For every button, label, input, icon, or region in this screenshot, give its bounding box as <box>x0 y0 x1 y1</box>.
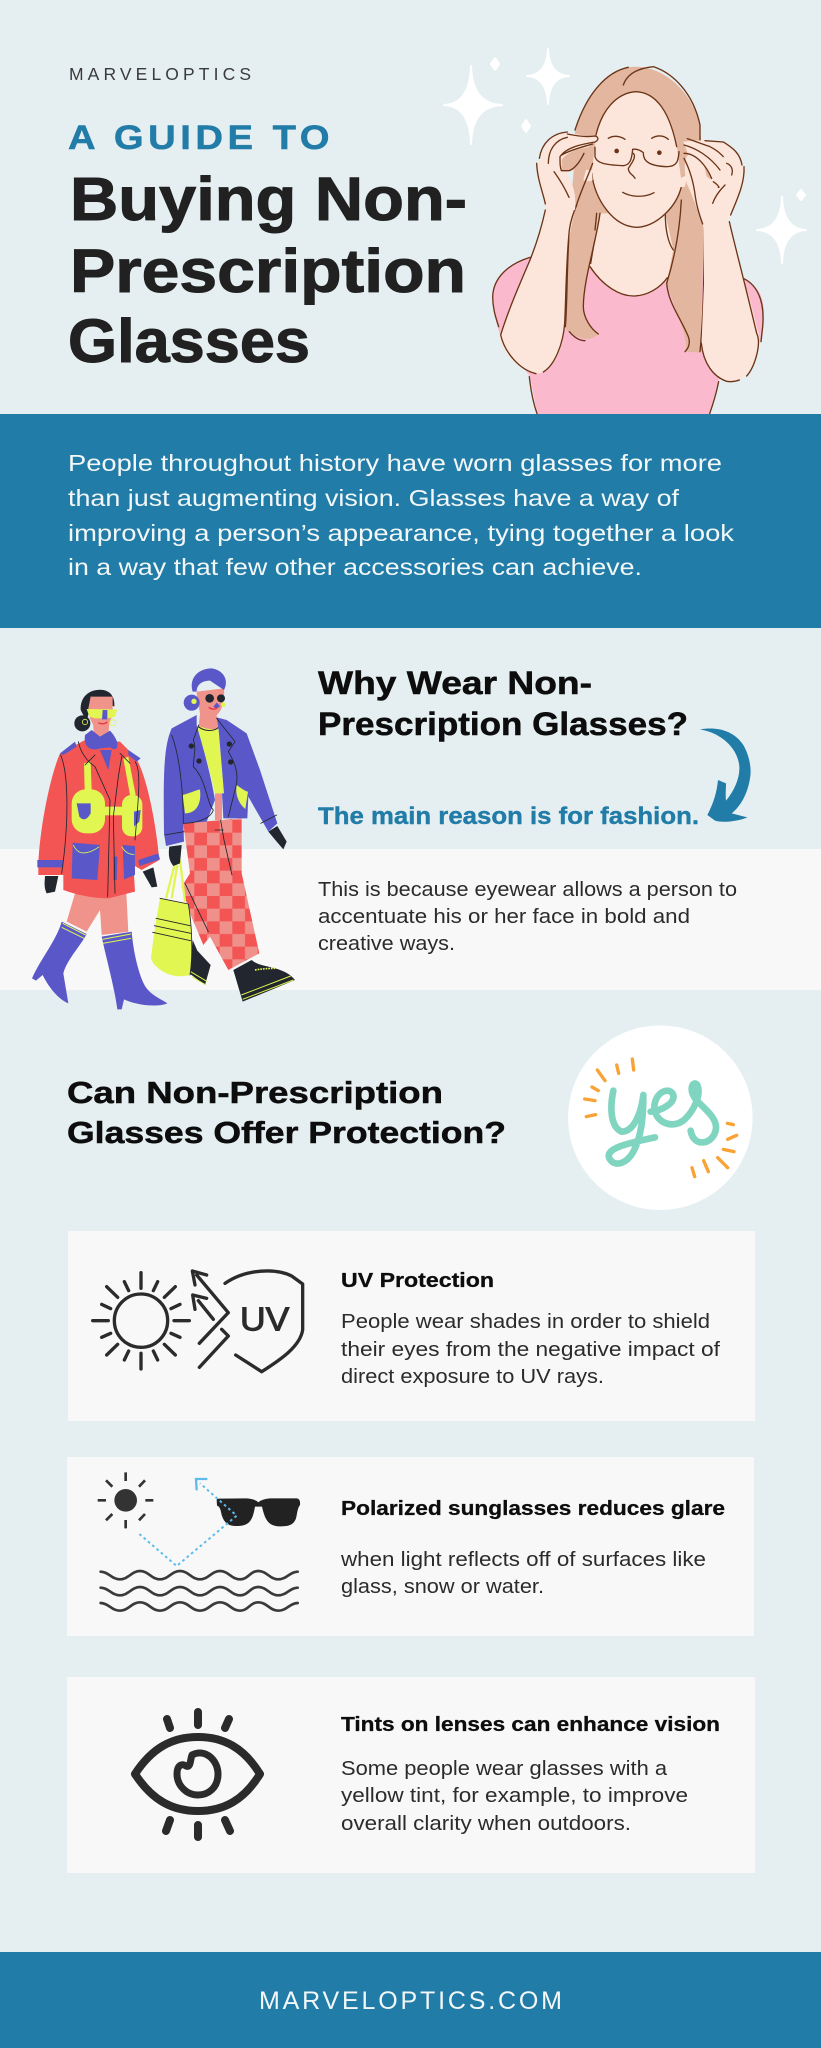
icon: eye <box>135 1712 260 1837</box>
main title: Glasses <box>68 307 310 375</box>
icon: glare reflected off water <box>98 1472 300 1611</box>
illustration: two fashionable women walking <box>32 668 295 1009</box>
card text <box>341 1758 688 1835</box>
right woman jacket <box>169 845 182 866</box>
card text: overall clarity when outdoors. <box>341 1813 631 1835</box>
arrow <box>700 728 751 822</box>
card: tinted lenses <box>67 1677 755 1873</box>
heading: protection: Glasses Offer Protection? <box>67 1115 506 1150</box>
footer url: MARVELOPTICS.COM <box>259 1987 562 2015</box>
fashion explanation text: creative ways. <box>318 933 455 955</box>
fashion explanation text <box>318 879 737 955</box>
card title: Polarized sunglasses reduces glare <box>341 1497 725 1520</box>
intro text: People throughout history have worn glasses for more <box>68 450 722 476</box>
intro band <box>0 414 821 628</box>
intro text: in a way that few other accessories can achieve. <box>68 554 642 580</box>
heading: why wear: Prescription Glasses? <box>318 706 688 742</box>
intro text: improving a person’s appearance, tying together a look <box>68 520 735 546</box>
main title: Buying Non- <box>70 165 467 233</box>
footer band <box>0 1952 821 2048</box>
heading: why wear <box>318 665 688 742</box>
intro text: than just augmenting vision. Glasses have a way of <box>68 485 680 511</box>
bag <box>166 860 185 902</box>
brand name: MARVELOPTICS <box>69 64 251 84</box>
card title: UV Protection <box>341 1269 494 1292</box>
left woman coat <box>45 876 58 893</box>
illustration: woman adjusting glasses <box>493 67 764 415</box>
left woman head <box>92 710 109 747</box>
yes badge <box>568 1025 753 1210</box>
icon: sun and UV shield <box>93 1271 303 1372</box>
title kicker: A GUIDE TO <box>68 119 334 157</box>
card: UV protection <box>68 1231 755 1421</box>
icon: sun and UV shield: UV <box>240 1301 289 1338</box>
heading: protection: Can Non-Prescription <box>67 1075 443 1110</box>
subheading: main reason: The main reason is for fashion. <box>318 803 699 830</box>
card text <box>341 1311 720 1388</box>
card text: their eyes from the negative impact of <box>341 1339 720 1361</box>
left woman legs and boots <box>67 887 128 935</box>
card text: People wear shades in order to shield <box>341 1311 710 1333</box>
back legs and shoes <box>189 940 211 985</box>
section strip <box>0 849 821 990</box>
left woman pouches <box>84 762 92 790</box>
card text: Some people wear glasses with a <box>341 1758 668 1780</box>
heading: protection <box>67 1075 506 1150</box>
heading: why wear: Why Wear Non- <box>318 665 592 701</box>
fashion explanation text: accentuate his or her face in bold and <box>318 906 690 928</box>
card text: glass, snow or water. <box>341 1576 544 1598</box>
card text: direct exposure to UV rays. <box>341 1366 604 1388</box>
card title: Tints on lenses can enhance vision <box>341 1713 720 1736</box>
main title: Prescription <box>70 237 466 305</box>
card text: when light reflects off of surfaces like <box>340 1549 706 1571</box>
main title <box>68 165 467 375</box>
intro text <box>68 450 735 580</box>
fashion explanation text: This is because eyewear allows a person to <box>318 879 737 901</box>
card text: yellow tint, for example, to improve <box>341 1785 688 1807</box>
card text <box>340 1549 706 1598</box>
card: polarized sunglasses <box>67 1457 754 1636</box>
sparkles <box>444 49 806 263</box>
